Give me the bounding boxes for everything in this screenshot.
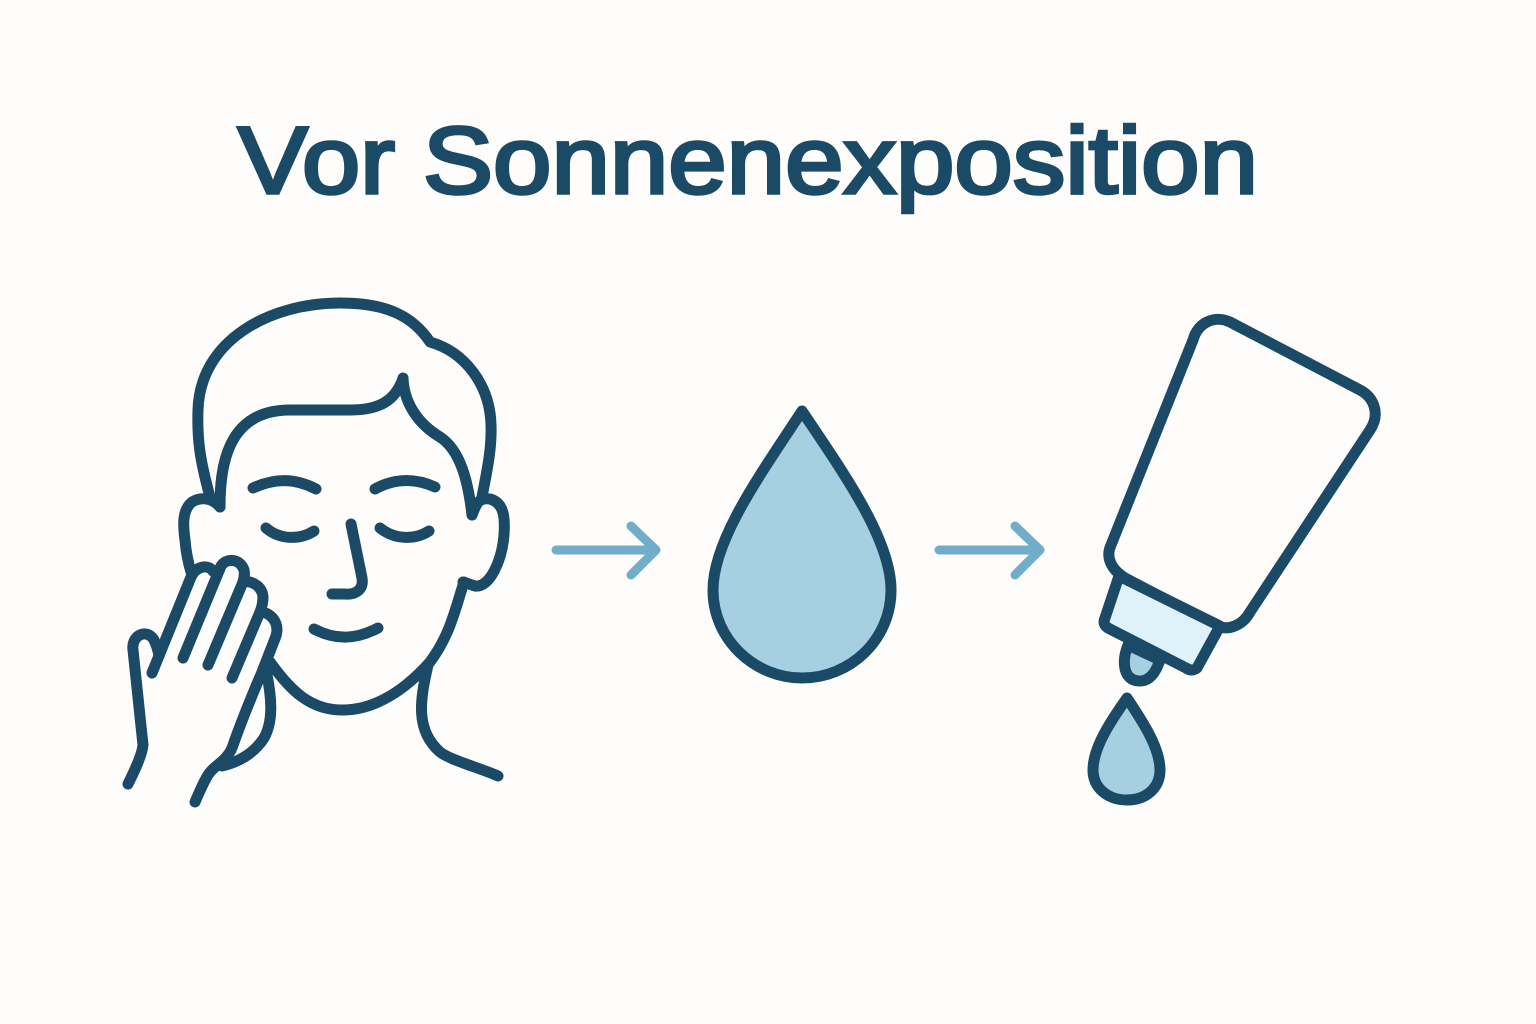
arrow: face to drop	[556, 526, 656, 575]
right eye	[380, 528, 429, 537]
nose	[332, 524, 362, 594]
left eyebrow	[253, 481, 316, 489]
arrow: drop to bottle	[939, 526, 1040, 575]
right neck and shoulder	[421, 665, 498, 776]
left eye	[266, 528, 314, 537]
hair outline	[198, 303, 491, 497]
hand	[128, 560, 277, 802]
title: Vor	[238, 108, 395, 214]
icon: face with hand on cheek	[128, 303, 504, 802]
right ear	[463, 499, 504, 586]
mouth	[314, 628, 378, 637]
icon: large water drop	[713, 411, 891, 678]
bottle cap	[1104, 576, 1220, 670]
right eyebrow	[375, 480, 435, 489]
jaw	[270, 582, 464, 710]
nozzle	[1124, 645, 1160, 681]
title: Sonnenexposition	[423, 108, 1258, 214]
hairline	[220, 378, 472, 515]
falling drop	[1093, 698, 1160, 800]
bottle body	[1109, 319, 1375, 628]
icon: bottle with drop	[1093, 319, 1375, 800]
left ear	[184, 499, 220, 572]
